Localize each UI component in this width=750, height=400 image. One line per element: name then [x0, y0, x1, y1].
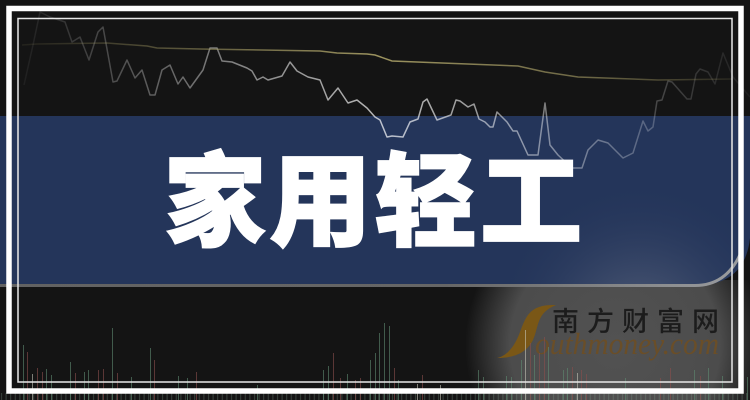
logo domain: outhmoney.com — [535, 326, 719, 361]
logo chinese name: 南方财富网 — [552, 300, 727, 339]
moving average line — [22, 43, 732, 80]
navy title band — [0, 116, 750, 286]
band bottom edge — [0, 250, 742, 286]
volume bars — [0, 323, 750, 400]
band lower right glow — [0, 116, 750, 286]
price line chart — [24, 12, 750, 168]
logo swoosh — [497, 305, 556, 358]
watermark: southmoney logo — [497, 300, 727, 361]
title: 家用轻工 — [164, 146, 582, 260]
gray glow behind watermark — [450, 280, 750, 400]
